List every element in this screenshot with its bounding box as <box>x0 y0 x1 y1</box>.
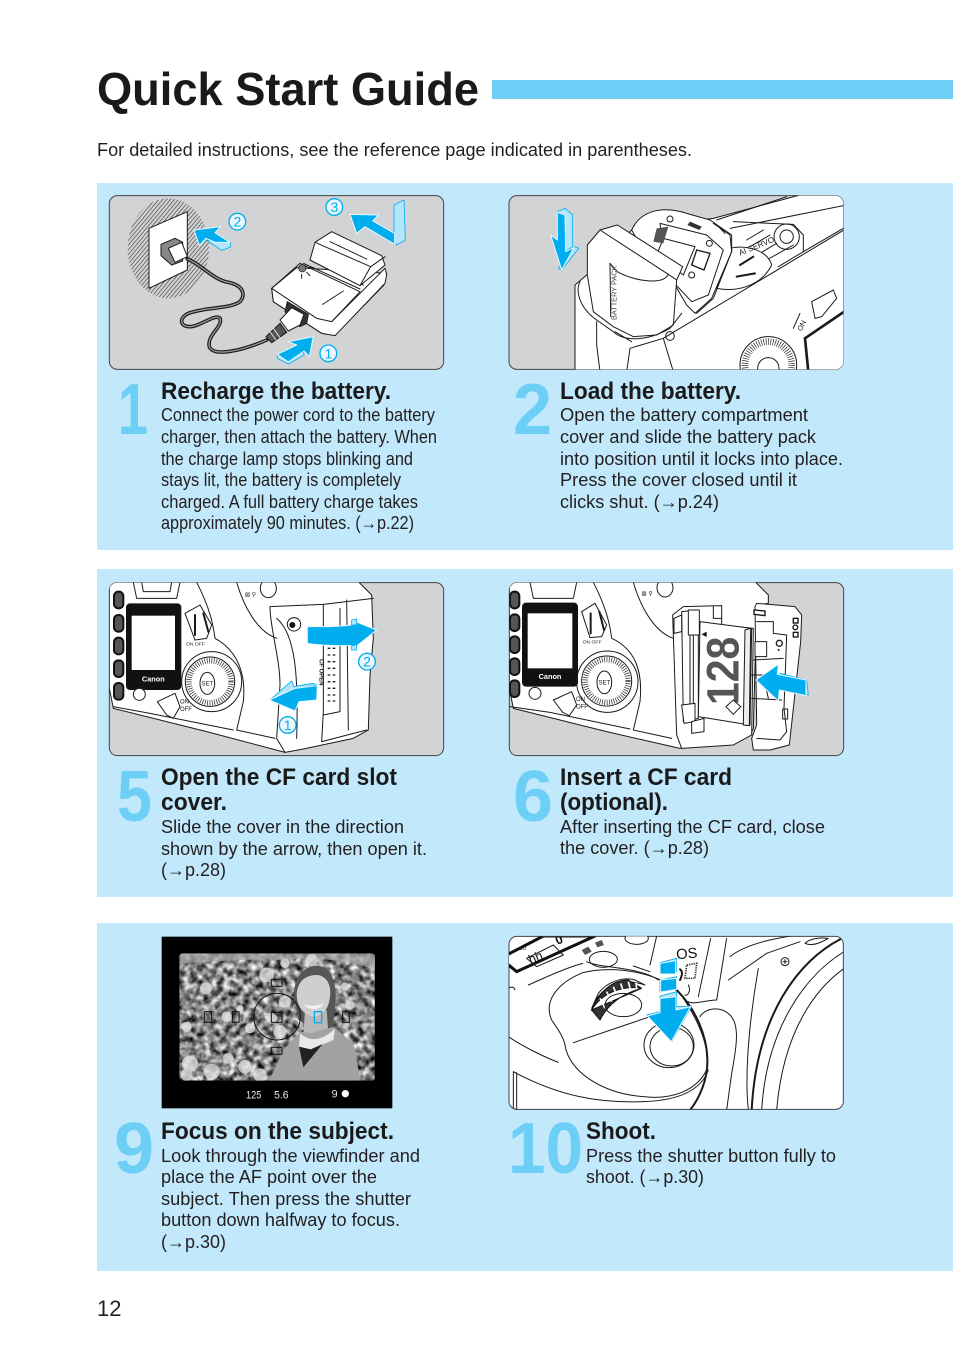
spot metering circle <box>254 993 300 1040</box>
rear LCD <box>126 603 181 690</box>
intro text: For detailed instructions, see the reference page indicated in parentheses. <box>97 140 692 160</box>
step 6 text: (optional). <box>560 789 668 816</box>
arrow 2 <box>206 240 231 250</box>
shutter button <box>644 1022 694 1068</box>
step 6 text: After inserting the CF card, close <box>560 817 825 837</box>
arrow 1 left <box>270 681 317 700</box>
illustration: open CF card slot cover: ON OFF <box>186 642 205 648</box>
rear LCD <box>522 603 578 687</box>
page number: 12 <box>97 1296 121 1321</box>
panel: row 3 background <box>97 923 953 1271</box>
open cover <box>752 603 802 750</box>
step 2 text: into position until it locks into place. <box>560 449 843 469</box>
step 9 text: button down halfway to focus. <box>161 1210 400 1230</box>
slot <box>673 606 753 748</box>
illustration: open CF card slot cover: Canon <box>142 675 165 684</box>
subject <box>294 966 336 1030</box>
step 10 text: Press the shutter button fully to <box>586 1146 836 1166</box>
illustration: shutter button: OS <box>676 946 698 963</box>
step 5 text: Slide the cover in the direction <box>161 817 404 837</box>
quick control dial <box>577 651 638 712</box>
illustration: loading battery into camera <box>508 195 844 370</box>
step 5 number: 5 <box>117 757 152 837</box>
step 10 text: shoot. (→p.30) <box>586 1167 704 1187</box>
title: Quick Start Guide <box>97 63 479 115</box>
side buttons <box>510 592 519 697</box>
step 5 text: shown by the arrow, then open it. <box>161 839 427 859</box>
active AF point <box>314 1012 322 1023</box>
illustration: loading battery into camera: BATTERY PACK <box>610 265 619 320</box>
step 10 text <box>586 1118 836 1187</box>
camera grip <box>578 282 682 339</box>
thumb knob <box>185 605 212 640</box>
step 9 text: subject. Then press the shutter <box>161 1189 411 1209</box>
illustration: shutter button <box>507 932 847 1110</box>
step marker 2 <box>229 213 246 230</box>
arrow 2 right <box>307 622 377 646</box>
illustration: insert CF card: Canon <box>539 672 562 681</box>
illustration: insert CF card: 128 <box>697 637 748 705</box>
step 1 text: approximately 90 minutes. (→p.22) <box>161 513 414 533</box>
step 6 text <box>560 764 825 858</box>
illustration: open CF card slot cover: SET <box>202 682 213 688</box>
illustration: shutter button: hh <box>527 949 545 967</box>
step 9 text: Focus on the subject. <box>161 1118 394 1145</box>
step 1 text: stays lit, the battery is completely <box>161 470 401 490</box>
power switch <box>812 290 837 318</box>
quick control dial <box>182 652 242 712</box>
viewfinder photo: 5.6 <box>274 1089 289 1101</box>
step 2 text: cover and slide the battery pack <box>560 427 817 447</box>
slot and plug <box>285 302 308 327</box>
press arrows <box>660 958 677 974</box>
rear dial <box>740 336 798 370</box>
illustration: insert CF card: SET <box>599 681 610 687</box>
illustration: open CF card slot cover <box>109 579 444 756</box>
step marker 3 <box>326 199 343 215</box>
step marker 3: 3 <box>330 199 338 215</box>
battery compartment door <box>632 210 732 313</box>
battery <box>310 232 385 286</box>
step 6 text: Insert a CF card <box>560 764 732 791</box>
step 1 text: Recharge the battery. <box>161 378 391 405</box>
step 9 text <box>161 1118 420 1252</box>
step 2 text: Load the battery. <box>560 378 741 405</box>
top LCD <box>507 936 595 972</box>
main dial area <box>549 970 707 1097</box>
grip and CF cover <box>270 598 373 752</box>
illustration: loading battery into camera: AI SERVO <box>737 235 776 258</box>
main dial wheel <box>592 979 645 1008</box>
side buttons <box>114 592 123 700</box>
panel: row 2 background <box>97 569 953 897</box>
illustration: open CF card slot cover: CF OPEN <box>317 659 323 686</box>
step 1 text: Connect the power cord to the battery <box>161 405 435 425</box>
step marker 1: 1 <box>324 345 332 361</box>
step marker 1 <box>279 717 296 733</box>
illustration: loading battery into camera: ON <box>795 319 808 333</box>
illustration: open CF card slot cover: OFF <box>180 707 192 713</box>
top buttons <box>589 951 617 967</box>
illustration: insert CF card: ON OFF <box>583 639 601 645</box>
down arrow <box>557 208 573 252</box>
step 10 number: 10 <box>508 1109 583 1189</box>
step 1 number: 1 <box>118 370 148 450</box>
thumb knob <box>582 603 607 638</box>
step 10 text: Shoot. <box>586 1118 656 1145</box>
step 9 text: (→p.30) <box>161 1232 226 1252</box>
AE lock buttons <box>260 579 276 598</box>
viewfinder readout: 125 <box>246 1089 261 1101</box>
insert arrow <box>780 673 808 695</box>
arrow 1 <box>277 351 304 364</box>
flower highlights <box>181 954 355 1082</box>
charger body <box>272 268 387 335</box>
step 9 text: Look through the viewfinder and <box>161 1146 420 1166</box>
power switch <box>157 693 180 718</box>
AF points <box>204 979 349 1054</box>
step 6 text: the cover. (→p.28) <box>560 838 709 858</box>
step 2 text: clicks shut. (→p.24) <box>560 492 719 512</box>
battery pack <box>587 225 683 337</box>
step 1 text <box>161 378 437 533</box>
illustration: open CF card slot cover: ⊠ ⚲ <box>245 592 256 599</box>
step 1 text: charger, then attach the battery. When <box>161 427 437 447</box>
illustration: shutter button: ISO <box>518 946 527 951</box>
step 1 text: charged. A full battery charge takes <box>161 492 418 512</box>
illustration: insert CF card <box>509 578 844 756</box>
step 2 text: Open the battery compartment <box>560 405 808 425</box>
step 1 text: the charge lamp stops blinking and <box>161 449 413 469</box>
step 5 text: Open the CF card slot <box>161 764 397 791</box>
CF card <box>698 622 752 725</box>
step marker 2 <box>359 653 375 670</box>
illustration: shutter button: 0 <box>553 932 565 948</box>
step 5 text: cover. <box>161 789 227 816</box>
step marker 1: 1 <box>284 717 292 733</box>
illustration: battery charger <box>109 196 444 369</box>
arrow 3 <box>394 200 405 245</box>
title accent bar <box>492 80 953 99</box>
step 5 text: (→p.28) <box>161 860 226 880</box>
step 9 text: place the AF point over the <box>161 1167 377 1187</box>
step 9 number: 9 <box>114 1109 154 1189</box>
illustration: insert CF card: ⊠ ⚲ <box>642 591 653 598</box>
viewfinder photo <box>162 937 392 1108</box>
step 5 text <box>161 764 427 880</box>
illustration: insert CF card: ON <box>576 697 585 703</box>
panel: row 1 background <box>97 183 953 550</box>
step 2 text <box>560 378 843 512</box>
step 2 text: Press the cover closed until it <box>560 470 797 490</box>
step 2 number: 2 <box>513 370 552 450</box>
viewfinder photo: 9 <box>332 1089 338 1101</box>
front body <box>728 932 847 1110</box>
step marker 1 <box>320 345 337 362</box>
illustration: open CF card slot cover: ON <box>180 699 189 705</box>
step 6 number: 6 <box>513 757 553 837</box>
step marker 2: 2 <box>233 214 241 230</box>
illustration: insert CF card: OFF <box>576 704 588 710</box>
step marker 2: 2 <box>363 654 371 670</box>
